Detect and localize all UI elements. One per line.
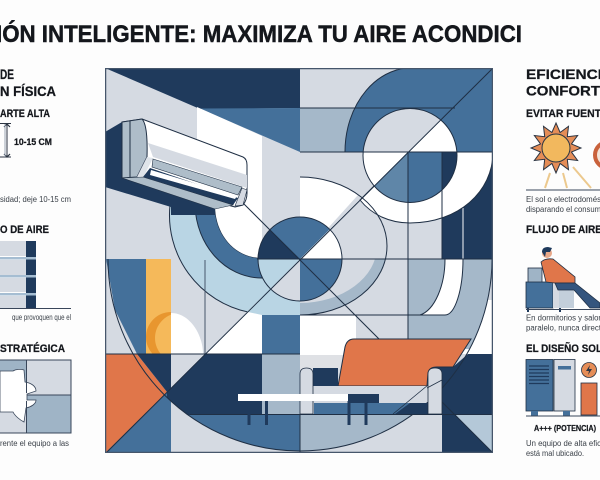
lower right blocks xyxy=(300,259,493,454)
icon: clearance dimension xyxy=(0,124,11,157)
text: efficiency note: está mal ubicado. xyxy=(526,449,584,458)
central circle xyxy=(258,216,342,302)
icon: efficient unit xyxy=(526,360,600,416)
subheading: strategic location: STRATÉGICA xyxy=(0,342,65,355)
white ring xyxy=(360,152,493,223)
left blocks xyxy=(106,259,203,354)
icon: louvres xyxy=(0,241,71,308)
heading: left column: DE xyxy=(0,66,14,82)
heading: left column: N FÍSICA xyxy=(0,83,56,99)
text: efficiency note xyxy=(526,439,600,458)
white petal xyxy=(300,178,358,228)
background field xyxy=(105,68,493,453)
panel: left column xyxy=(0,66,71,448)
panel: central geometric illustration xyxy=(105,68,493,455)
air swirl rings xyxy=(169,205,300,354)
steel crescent xyxy=(300,260,385,314)
baseline xyxy=(526,189,600,191)
inner circle xyxy=(362,108,458,203)
heading: right column: EFICIENCI xyxy=(526,66,600,82)
air conditioner xyxy=(105,119,247,215)
sofa xyxy=(300,339,471,414)
panel: right column xyxy=(526,66,600,458)
heading: right column: CONFORT xyxy=(526,82,600,98)
text: heat sources note xyxy=(526,195,600,214)
geometric lines xyxy=(105,68,493,454)
text: placement note: rente el equipo a las xyxy=(0,439,69,448)
text: clearance note: sidad; deje 10-15 cm xyxy=(0,195,71,204)
heading: left column xyxy=(0,66,56,99)
icon: floor plan xyxy=(0,360,71,433)
icon: sun xyxy=(531,123,591,188)
label: clearance: 10-15 CM xyxy=(14,137,52,147)
text: air flow note xyxy=(526,314,600,332)
heading: right column xyxy=(526,66,600,98)
subheading: high placement: ARTE ALTA xyxy=(0,108,50,120)
panel border xyxy=(106,68,492,452)
title: IÓN INTELIGENTE: MAXIMIZA TU AIRE ACONDICI xyxy=(0,20,522,48)
text: airflow note: que provoquen que el xyxy=(12,313,71,322)
icon: person in armchair xyxy=(526,247,600,312)
coffee table xyxy=(238,394,379,425)
upper left wall xyxy=(108,69,300,205)
upper right arch xyxy=(300,68,493,259)
icon: appliance heat ring xyxy=(595,142,600,168)
lower left blocks xyxy=(105,354,301,455)
subheading: airflow: O DE AIRE xyxy=(0,224,49,236)
